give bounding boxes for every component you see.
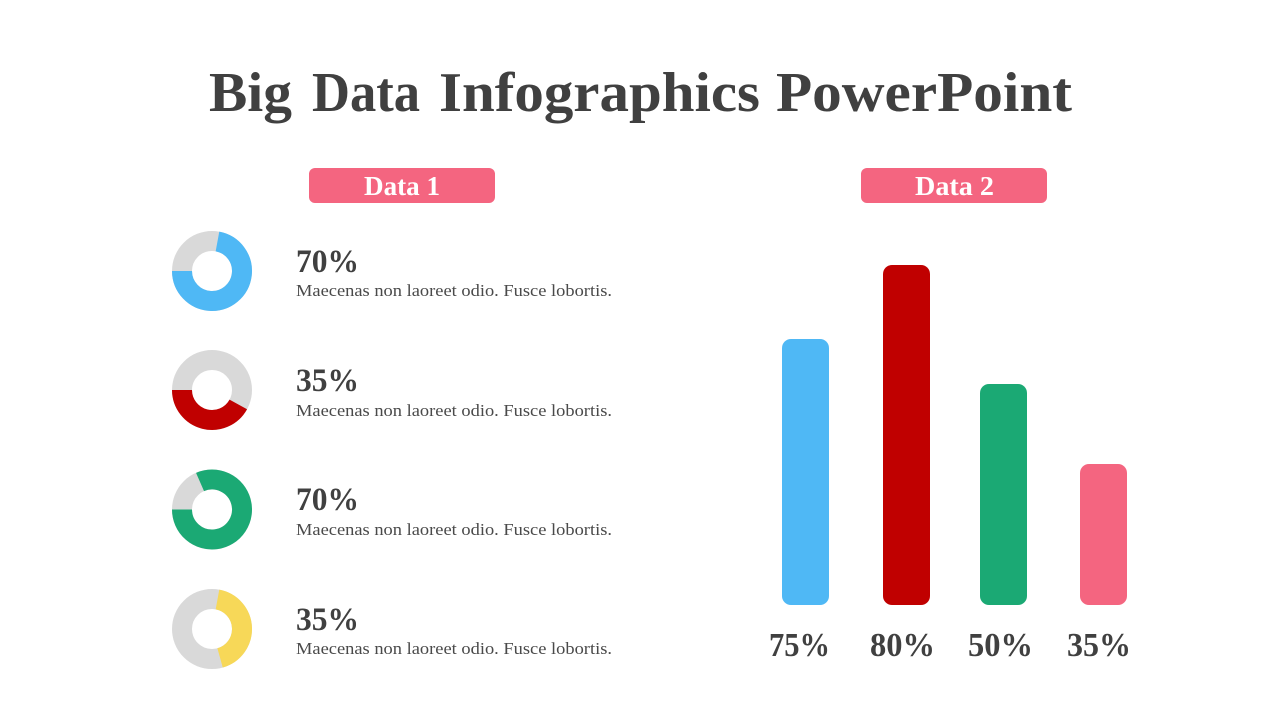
bar label: 75%: 75% (769, 627, 830, 664)
bar: 35% (1080, 464, 1127, 605)
title: Data (312, 62, 420, 124)
text block: 70% green: Maecenas non laoreet odio. Fusce lobortis. (296, 520, 612, 539)
text block: 70% green (296, 482, 612, 539)
donut: red 35% (182, 360, 242, 420)
heading: data 1 (309, 168, 495, 203)
panel: data 1 (182, 168, 612, 659)
text block: 35% red (296, 363, 612, 420)
text block: 35% yellow: 35% (296, 602, 359, 638)
panel: data 2 (769, 168, 1131, 664)
title: PowerPoint (776, 62, 1072, 124)
text block: 35% yellow (296, 602, 612, 658)
title: Infographics (439, 62, 760, 124)
bar label: 35%: 35% (1067, 627, 1131, 664)
donut: blue 70% (182, 241, 242, 301)
text block: 70% blue: 70% (296, 244, 359, 280)
bar label: 80%: 80% (870, 627, 935, 664)
title (209, 62, 1072, 124)
text block: 35% red: 35% (296, 363, 359, 399)
text block: 35% red: Maecenas non laoreet odio. Fusce lobortis. (296, 401, 612, 420)
heading: data 1: Data 1 (364, 171, 440, 201)
heading: data 2 (861, 168, 1047, 203)
donut: green 70% (182, 480, 242, 540)
bar chart (769, 265, 1131, 664)
text block: 70% blue: Maecenas non laoreet odio. Fusce lobortis. (296, 281, 612, 300)
text block: 35% yellow: Maecenas non laoreet odio. Fusce lobortis. (296, 639, 612, 658)
bar: 75% (782, 339, 829, 605)
heading: data 2: Data 2 (915, 171, 994, 201)
bar: 80% (883, 265, 930, 605)
text block: 70% blue (296, 244, 612, 300)
bar label: 50%: 50% (968, 627, 1033, 664)
donut: yellow 35% (182, 599, 242, 659)
bar: 50% (980, 384, 1027, 605)
text block: 70% green: 70% (296, 482, 359, 518)
title: Big (209, 62, 292, 124)
